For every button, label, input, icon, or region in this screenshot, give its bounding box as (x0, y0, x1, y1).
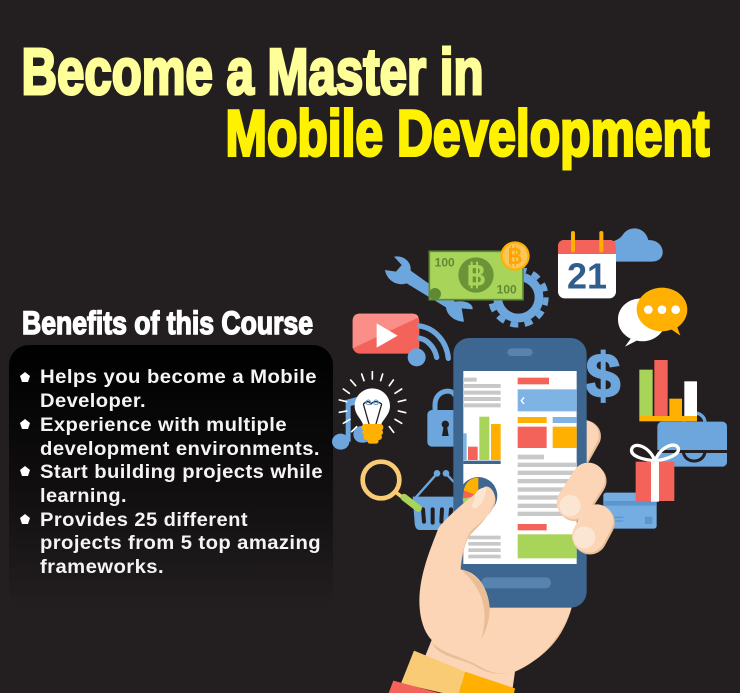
icon: bitcoin coin: B (508, 243, 522, 269)
bullet list text: Helps you become a Mobile (40, 366, 317, 388)
bullet list text: projects from 5 top amazing (40, 532, 321, 554)
icon: magnifying glass (363, 462, 418, 508)
bullet list text: frameworks. (40, 556, 164, 578)
heading: benefits: Benefits of this Course (22, 305, 313, 341)
icon: padlock (427, 391, 457, 447)
bullets (20, 372, 30, 524)
bullet list text: Experience with multiple (40, 414, 287, 436)
bullet list text: development environments. (40, 438, 320, 460)
icon: credit card (603, 493, 657, 529)
phone (453, 338, 587, 608)
icon: cloud (612, 228, 663, 262)
title line 1: Become a Master in (22, 35, 484, 108)
bullet list text: Developer. (40, 390, 146, 412)
screen pie chart (459, 477, 497, 515)
palm and thumb (419, 487, 572, 693)
bullet list text: Start building projects while (40, 461, 323, 483)
panel background (9, 345, 333, 610)
icon: shopping basket (413, 470, 457, 530)
icon: gear (491, 270, 546, 325)
icon: light bulb (339, 372, 406, 444)
icon: bitcoin coin (500, 241, 530, 271)
screen bar chart (463, 417, 501, 464)
icon: gift box (632, 445, 678, 502)
hand (387, 479, 598, 693)
icon: shopping bag (657, 413, 727, 467)
icon: banknote: B (467, 259, 486, 292)
illustration: phone in hand with icons (332, 228, 727, 693)
icon: banknote: 100 (497, 283, 517, 297)
bullet list text (40, 366, 323, 578)
icon: banknote: 100 (435, 255, 455, 269)
icon: banknote (429, 251, 523, 300)
title (22, 35, 710, 170)
phone screen (459, 371, 577, 564)
icon: wrench (385, 256, 473, 322)
icon: video play (353, 314, 419, 354)
hand behind phone (585, 420, 601, 463)
finger 1 (559, 479, 590, 516)
panel: benefits list (9, 345, 333, 610)
bullet list text: Provides 25 different (40, 509, 248, 531)
bullet list text: learning. (40, 485, 127, 507)
icon: calendar (558, 231, 616, 298)
icon: dollar sign: $ (586, 341, 620, 411)
finger 2 (573, 521, 598, 548)
icon: music note (332, 397, 358, 450)
sleeve (387, 651, 515, 693)
icon: wifi signal (408, 326, 448, 366)
icon: chat bubbles (618, 288, 687, 347)
icon: bar chart (639, 360, 697, 421)
icon: calendar: 21 (567, 255, 607, 296)
